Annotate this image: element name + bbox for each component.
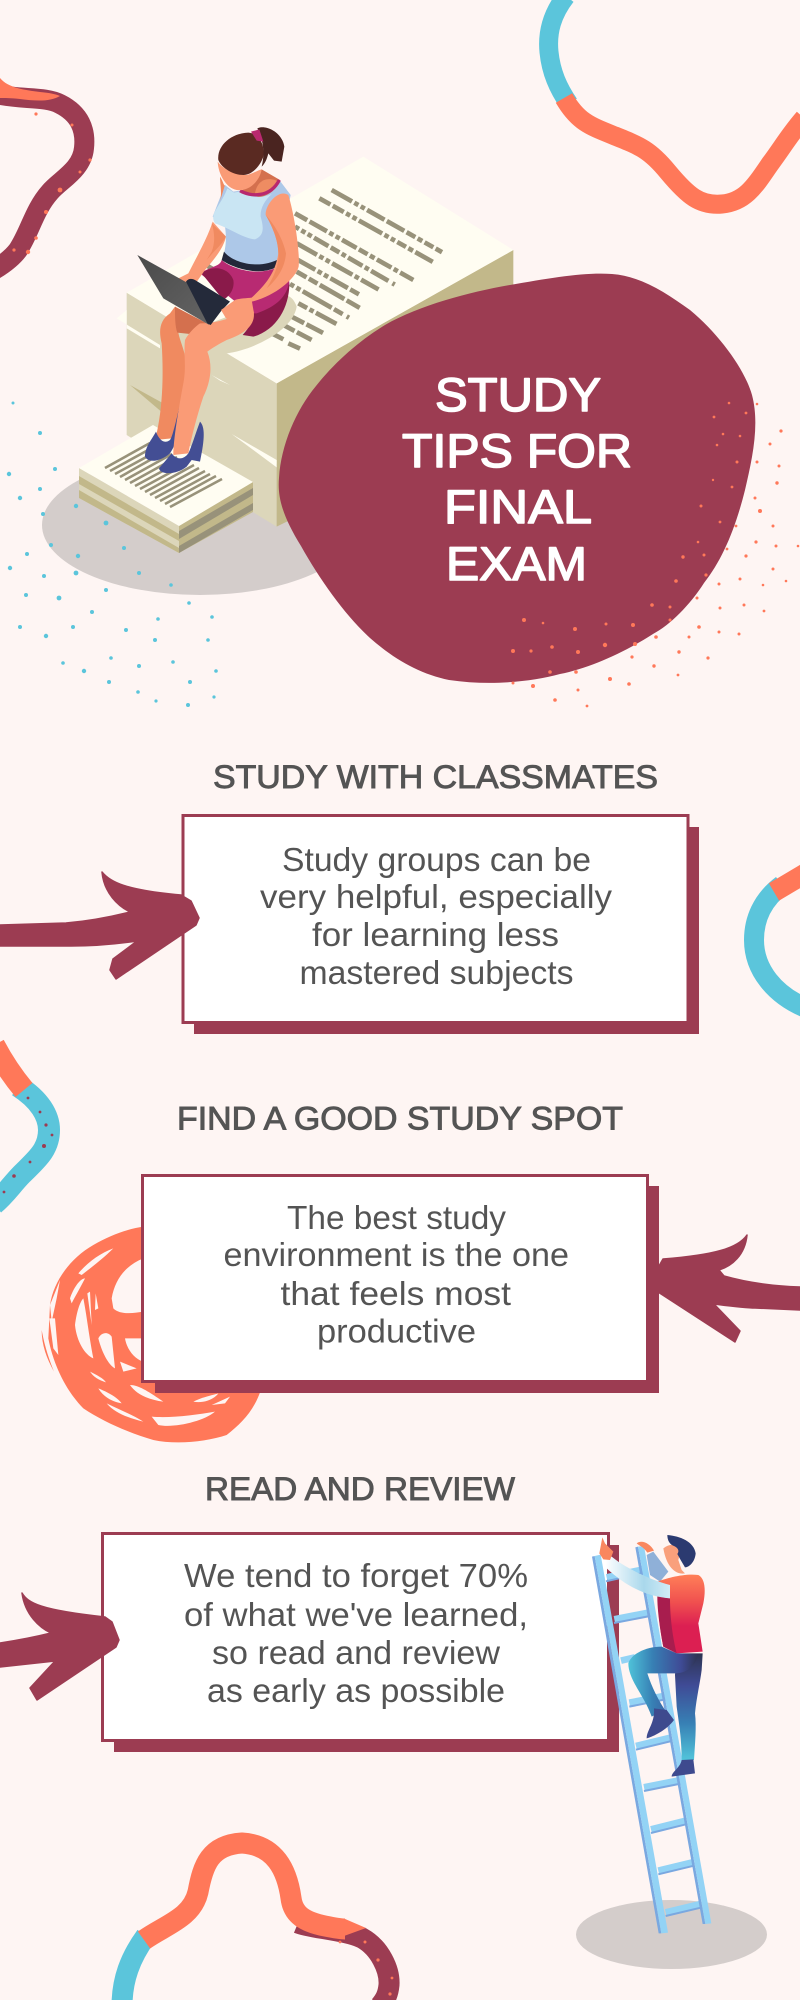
panel: study spot: The best study (287, 1199, 507, 1236)
squiggle: middle right ring (754, 873, 800, 1008)
panel: read and review: We tend to forget 70% (184, 1557, 528, 1594)
title blob (279, 274, 755, 683)
hair (257, 127, 284, 167)
top (213, 180, 291, 265)
paper stack: small (79, 425, 253, 553)
squiggle: bottom (122, 1843, 393, 2000)
woman with laptop (137, 127, 299, 473)
front leg (173, 310, 254, 455)
title: EXAM (446, 537, 587, 590)
skirt (200, 260, 289, 317)
scribble circle (42, 1227, 263, 1442)
panel: study spot: productive (317, 1312, 476, 1350)
ladder (592, 1546, 711, 1933)
head (663, 1545, 685, 1574)
ground shadow: woman (42, 455, 358, 595)
back leg (155, 307, 200, 440)
title: FINAL (444, 480, 592, 533)
paper text lines (206, 190, 450, 349)
back shoe (145, 407, 183, 461)
arrow: to read and review (0, 1593, 119, 1700)
panel: study spot: environment is the one (224, 1236, 569, 1273)
dots: blue (7, 402, 218, 707)
front shoe (159, 422, 204, 473)
panel: study groups (183, 816, 699, 1034)
shirt (657, 1575, 705, 1653)
squiggle: top left (0, 78, 92, 270)
panel: study spot: that feels most (280, 1275, 511, 1312)
panel: study groups: very helpful, especially (260, 878, 613, 915)
panel: study groups: mastered subjects (300, 954, 574, 991)
heading: study with classmates: STUDY WITH CLASSMATES (213, 759, 658, 795)
heading: find a good study spot: FIND A GOOD STUDY SPOT (177, 1100, 623, 1136)
right arm (235, 193, 299, 302)
front leg (628, 1647, 698, 1717)
panel: study groups: Study groups can be (282, 841, 591, 878)
panel: read and review (102, 1534, 619, 1752)
title: TIPS FOR (402, 424, 632, 477)
panel: read and review: as early as possible (207, 1672, 505, 1709)
arrow: to study groups (0, 872, 199, 979)
panel: read and review: so read and review (212, 1634, 500, 1671)
heading: read and review: READ AND REVIEW (205, 1471, 516, 1507)
upper body (178, 127, 299, 337)
left arm (178, 222, 226, 287)
man climbing ladder (592, 1535, 711, 1933)
arrow: to study spot (658, 1235, 800, 1342)
title (402, 368, 632, 590)
neck (242, 169, 280, 197)
title: STUDY (435, 368, 601, 421)
panel: study spot (142, 1176, 659, 1393)
dots: orange (511, 402, 799, 707)
back leg (675, 1653, 703, 1760)
face (218, 162, 262, 190)
laptop (137, 255, 209, 325)
squiggle: middle left (0, 1045, 53, 1204)
small paper lines (105, 443, 222, 507)
back arm (647, 1552, 668, 1582)
ground shadow: ladder (576, 1900, 767, 1969)
paper stack: large (117, 157, 513, 527)
panel: study groups: for learning less (312, 916, 559, 953)
shoes (647, 1708, 674, 1738)
squiggle: top right (549, 0, 800, 204)
front arm (605, 1557, 670, 1598)
panel: read and review: of what we've learned, (184, 1596, 528, 1633)
